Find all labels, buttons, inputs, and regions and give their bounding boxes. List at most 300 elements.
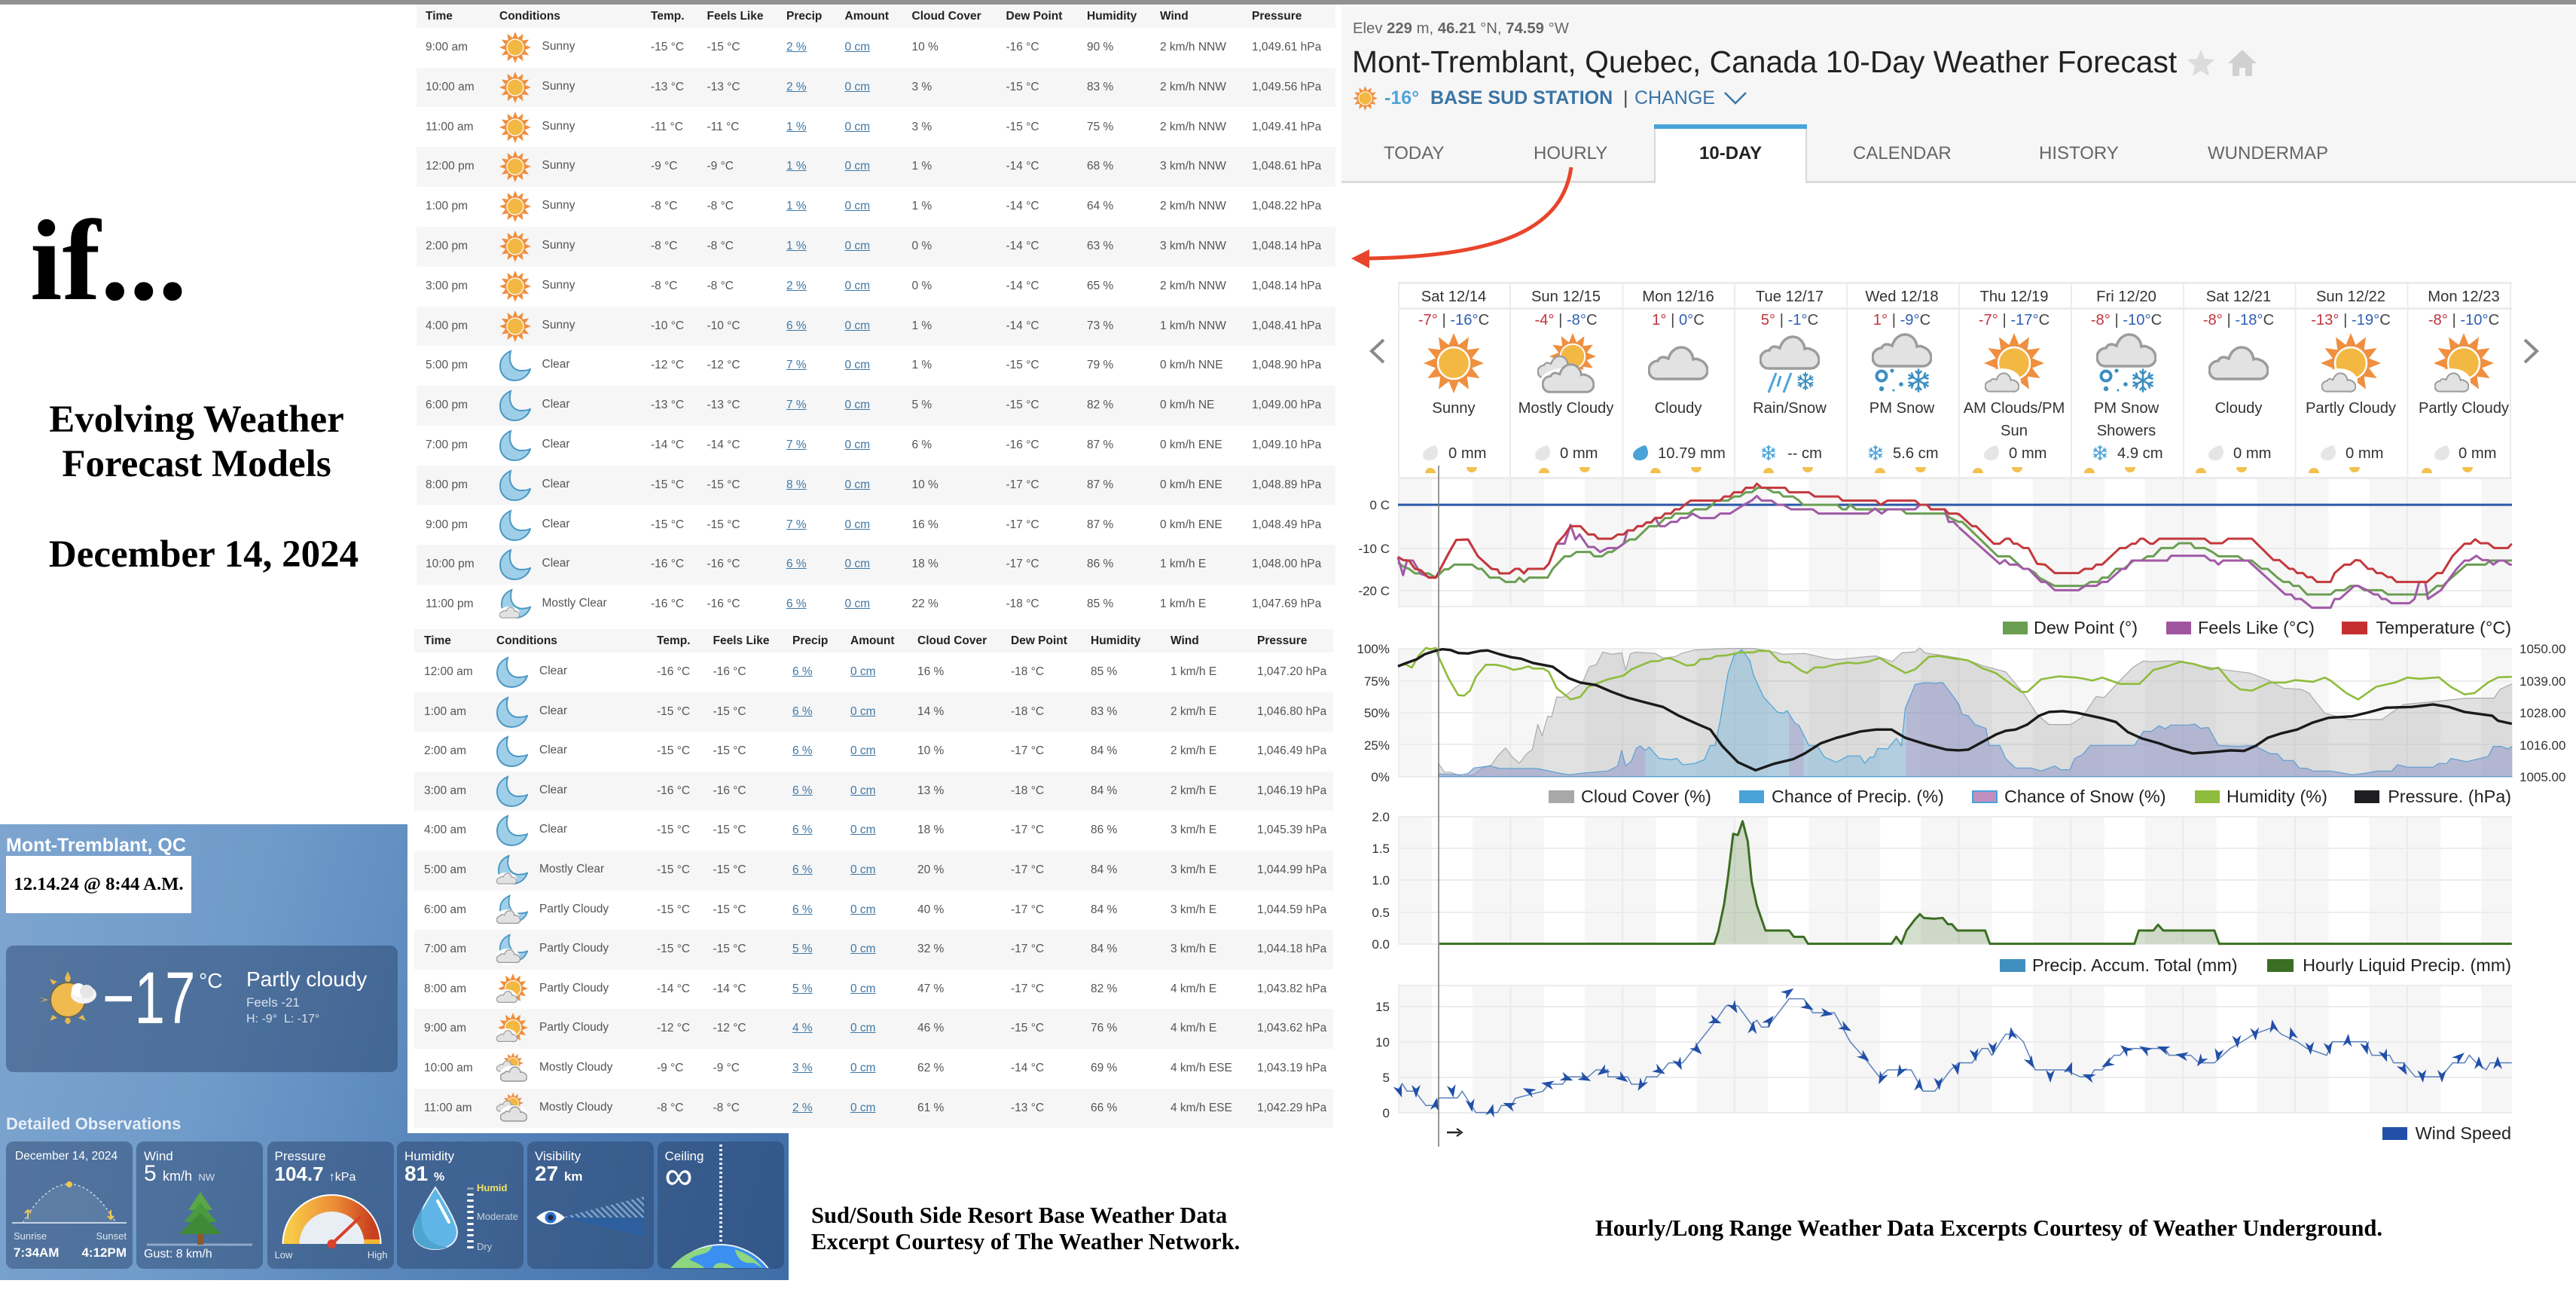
table header: Humidity [1091,634,1140,647]
row 2:00 pm: 1,048.14 hPa [1252,240,1321,252]
row 6:00 pm: 82 % [1087,399,1113,411]
row 9:00 am: 4 % [792,1022,813,1034]
day: Fri 12/20: Fri 12/20 [2096,289,2156,305]
day: Thu 12/19 [1964,289,2065,473]
row 7:00 am [414,930,1333,970]
row 2:00 am [424,735,1327,767]
high and low: H: -9° L: -17° [246,1013,319,1025]
row 10:00 am: 62 % [917,1062,944,1074]
row 7:00 pm: 7 % [786,439,807,451]
date: December 14, 2024 [15,1150,118,1163]
legend: precipitation [2000,955,2511,975]
row 9:00 pm: 87 % [1087,518,1113,531]
row 11:00 am: 1,042.29 hPa [1257,1102,1326,1114]
row 5:00 am: -17 °C [1011,863,1044,876]
legend: precipitation: Hourly Liquid Precip. (mm) [2303,955,2511,975]
day: Sat 12/14: Sunny [1432,400,1476,417]
row 8:00 am: -14 °C [713,982,746,995]
day: Mon 12/23: Mon 12/23 [2428,289,2500,305]
row 9:00 am: 1,043.62 hPa [1257,1022,1326,1034]
row 4:00 am: 0 cm [850,824,876,836]
row 1:00 am: 83 % [1091,705,1117,718]
row 2:00 pm: -14 °C [1006,240,1039,252]
row 1:00 pm [426,191,1321,222]
legend: humidity chart: Cloud Cover (%) [1581,787,1711,806]
chart: temperature [1358,479,2512,608]
chart: humidity cloud precip pressure: 1016.00 [2520,738,2565,753]
wind label: Wind [144,1149,173,1163]
row 8:00 pm: Clear [542,478,570,490]
title: if...: if... [30,197,187,325]
row 4:00 pm: 1 km/h NNW [1160,319,1226,332]
table header: Time [424,634,451,647]
arrow: hourly to table [1351,167,1571,268]
row 10:00 am: 2 % [786,81,807,93]
day: Wed 12/18: Wed 12/18 [1865,289,1939,305]
row 3:00 am: 84 % [1091,784,1117,797]
scale label moderate: Moderate [477,1211,518,1222]
row 6:00 am: 0 cm [850,903,876,916]
row 10:00 am: 10:00 am [426,81,475,93]
row 3:00 pm: -14 °C [1006,280,1039,292]
day: Fri 12/20: 4.9 cm [2117,445,2163,462]
row 8:00 pm: 87 % [1087,478,1113,491]
row 11:00 am: 3 % [911,121,932,133]
row 7:00 pm: 7:00 pm [426,439,468,451]
elevation line: Elev 229 m, 46.21 °N, 74.59 °W [1353,20,1570,37]
row 4:00 pm: 4:00 pm [426,319,468,332]
chart: temperature: -20 C [1358,584,1390,598]
icon: earth and dotted line [657,1141,783,1269]
row 8:00 pm: -15 °C [707,478,740,491]
row 4:00 am: 6 % [792,824,813,836]
row 5:00 pm: 0 cm [845,359,870,371]
day: Mon 12/16: 10.79 mm [1658,445,1726,462]
pressure label: Pressure [274,1149,326,1163]
row 3:00 pm: 2 km/h NNW [1160,280,1226,292]
row 9:00 pm: Clear [542,518,570,530]
row 6:00 am [424,894,1327,924]
table header: Time [426,10,453,23]
tab navigation: CALENDAR [1853,143,1952,163]
row 1:00 am [414,692,1333,732]
table header: Feels Like [707,10,763,23]
tab navigation: WUNDERMAP [2208,143,2328,163]
day: Fri 12/20 [2084,289,2163,473]
row 2:00 am: 2 km/h E [1170,744,1216,757]
day: Mon 12/16: 1° | 0°C [1652,312,1705,328]
row 10:00 pm: 0 cm [845,558,870,570]
icon: small wind arrow [1447,1129,1462,1136]
row 10:00 am: Mostly Cloudy [539,1061,612,1074]
row 4:00 pm: 1,048.41 hPa [1252,319,1321,332]
chart: humidity cloud precip pressure: 0% [1371,770,1390,784]
day: Mon 12/23: 0 mm [2458,445,2496,462]
card: date and sunrise sunset [6,1141,133,1269]
day: Sun 12/15: -4° | -8°C [1534,312,1598,328]
chart: humidity cloud precip pressure: 25% [1364,738,1390,753]
row 10:00 pm [417,545,1335,585]
row 6:00 pm: 1,049.00 hPa [1252,399,1321,411]
panel: hourly table today [417,5,1335,619]
row 2:00 pm: Sunny [542,239,575,252]
row 5:00 pm: 1 % [911,359,932,371]
row 9:00 pm: -17 °C [1006,518,1039,531]
row 2:00 pm: -8 °C [707,240,734,252]
row 10:00 am: -9 °C [713,1062,740,1074]
chart: wind speed: 15 [1375,1000,1390,1014]
row 2:00 am: -17 °C [1011,744,1044,757]
chart: precipitation: 0.5 [1372,906,1390,920]
icon: left chevron [1372,340,1384,362]
day: Fri 12/20: Showers [2097,423,2156,439]
table header [414,629,1333,652]
row 12:00 am: -16 °C [657,665,690,678]
humidity label: Humidity [404,1149,454,1163]
row 11:00 am [414,1089,1333,1128]
heading: Detailed Observations: Detailed Observations [6,1114,181,1133]
row 12:00 pm [417,147,1335,187]
day: Sun 12/22: Sun 12/22 [2316,289,2385,305]
day: Thu 12/19: Sun [2001,423,2028,439]
row 7:00 pm: 0 km/h ENE [1160,439,1222,451]
row 11:00 am: Mostly Cloudy [539,1101,612,1114]
chart: temperature: -10 C [1358,542,1390,556]
row 2:00 pm: 0 % [911,240,932,252]
current station line: BASE SUD STATION [1430,87,1613,108]
row 8:00 am: Partly Cloudy [539,982,609,995]
row 6:00 am: -17 °C [1011,903,1044,916]
row 12:00 pm: Sunny [542,159,575,172]
row 10:00 am: 83 % [1087,81,1113,93]
row 4:00 pm: 6 % [786,319,807,332]
row 6:00 am: 6:00 am [424,903,466,916]
row 11:00 am: 0 cm [845,121,870,133]
day: Wed 12/18 [1865,289,1939,473]
row 5:00 am: 5:00 am [424,863,466,876]
table header: Amount [850,634,895,647]
row 9:00 am: Partly Cloudy [539,1021,609,1034]
chart: humidity cloud precip pressure: 1050.00 [2520,642,2565,656]
row 1:00 am: 2 km/h E [1170,705,1216,718]
row 4:00 am: Clear [539,823,567,836]
row 10:00 pm: -17 °C [1006,558,1039,570]
low label: Low [274,1249,292,1261]
row 6:00 pm: 0 km/h NE [1160,399,1214,411]
row 3:00 am: 0 cm [850,784,876,797]
row 6:00 am: -15 °C [657,903,690,916]
sunrise time: 7:34AM [14,1245,59,1260]
row 12:00 pm: -9 °C [707,160,734,173]
row 10:00 am: -13 °C [651,81,684,93]
row 4:00 pm: -10 °C [707,319,740,332]
row 8:00 am: 8:00 am [424,982,466,995]
row 11:00 am: 4 km/h ESE [1170,1102,1232,1114]
row 1:00 am: 1,046.80 hPa [1257,705,1326,718]
scale label dry: Dry [477,1241,492,1252]
row 5:00 pm: 7 % [786,359,807,371]
row 12:00 am: 0 cm [850,665,876,678]
row 10:00 am: 10:00 am [424,1062,473,1074]
row 12:00 am: Clear [539,665,567,677]
row 5:00 pm: 0 km/h NNE [1160,359,1223,371]
row 8:00 pm: 10 % [911,478,939,491]
row 2:00 pm: 1 % [786,240,807,252]
day: Thu 12/19: -7° | -17°C [1979,312,2050,328]
row 6:00 pm: 7 % [786,399,807,411]
row 1:00 pm: 2 km/h NNW [1160,200,1226,212]
row 4:00 am: 18 % [917,824,944,836]
row 6:00 pm: 5 % [911,399,932,411]
row 5:00 pm: 5:00 pm [426,359,468,371]
day: Sun 12/22: -13° | -19°C [2311,312,2391,328]
row 9:00 pm: -15 °C [707,518,740,531]
row 9:00 am: 2 % [786,41,807,53]
row 2:00 pm: -8 °C [651,240,677,252]
row 11:00 am: 11:00 am [426,121,473,133]
row 10:00 am: -14 °C [1011,1062,1044,1074]
row 12:00 pm: -9 °C [651,160,677,173]
row 1:00 pm: Sunny [542,199,575,212]
day: Mon 12/23: Partly Cloudy [2419,400,2510,417]
row 10:00 am: 4 km/h ESE [1170,1062,1232,1074]
chart: precipitation: 1.5 [1372,842,1390,856]
row 10:00 am: 3 % [911,81,932,93]
row 1:00 pm: 64 % [1087,200,1113,212]
row 8:00 pm [417,466,1335,505]
tab navigation [1384,124,2328,185]
row 8:00 pm: 8 % [786,478,807,491]
row 9:00 am: -15 °C [651,41,684,53]
day: Sat 12/14: -7° | -16°C [1418,312,1489,328]
row 12:00 pm: 3 km/h NNW [1160,160,1226,173]
row 6:00 am: -15 °C [713,903,746,916]
legend: humidity chart [1549,787,2511,806]
row 4:00 pm: -10 °C [651,319,684,332]
row 11:00 am: 1,049.41 hPa [1252,121,1321,133]
table header: Wind [1170,634,1199,647]
row 6:00 pm [417,386,1335,426]
table header: Pressure [1257,634,1307,647]
row 10:00 am [414,1049,1333,1089]
row 3:00 am: 1,046.19 hPa [1257,784,1326,797]
row 12:00 am: 85 % [1091,665,1117,678]
row 9:00 am: 46 % [917,1022,944,1034]
row 9:00 am: 2 km/h NNW [1160,41,1226,53]
row 8:00 am: 4 km/h E [1170,982,1216,995]
day: Sun 12/15: 0 mm [1560,445,1598,462]
row 6:00 am: Partly Cloudy [539,903,609,915]
row 12:00 am: 1 km/h E [1170,665,1216,678]
row 6:00 am: 6 % [792,903,813,916]
row 4:00 am: -17 °C [1011,824,1044,836]
row 8:00 pm: -17 °C [1006,478,1039,491]
row 6:00 pm: -13 °C [707,399,740,411]
row 11:00 pm: 1,047.69 hPa [1252,597,1321,610]
row 1:00 am: 6 % [792,705,813,718]
location heading: Mont-Tremblant, QC [6,835,186,856]
day: Mon 12/23 [2419,289,2510,473]
row 9:00 am: -15 °C [707,41,740,53]
row 9:00 am [426,32,1321,63]
row 7:00 pm [426,429,1321,461]
row 5:00 am: 20 % [917,863,944,876]
row 11:00 pm: -16 °C [707,597,740,610]
row 9:00 pm: 7 % [786,518,807,531]
row 5:00 am [414,851,1333,891]
row 1:00 pm: 0 cm [845,200,870,212]
row 10:00 am: 3 % [792,1062,813,1074]
day: Sun 12/22: Partly Cloudy [2306,400,2397,417]
table header: Cloud Cover [917,634,987,647]
icon: water drop and scale [397,1141,523,1269]
row 3:00 am: 13 % [917,784,944,797]
row 5:00 am: 84 % [1091,863,1117,876]
legend: temperature: Temperature (°C) [2376,618,2511,637]
row 4:00 am: 86 % [1091,824,1117,836]
page title: Mont-Tremblant, Quebec, Canada 10-Day Weather Forecast [1352,44,2178,79]
row 5:00 pm: Clear [542,358,570,371]
row 11:00 pm: 0 cm [845,597,870,610]
row 3:00 pm: 65 % [1087,280,1113,292]
row 7:00 am: 7:00 am [424,943,466,955]
icon: home [2228,50,2257,76]
row 11:00 pm: 85 % [1087,597,1113,610]
row 1:00 am: -15 °C [713,705,746,718]
heading: date: December 14, 2024 [49,533,359,576]
row 11:00 am: 2 km/h NNW [1160,121,1226,133]
row 9:00 am: 9:00 am [424,1022,466,1034]
row 12:00 am: -18 °C [1011,665,1044,678]
row 9:00 am: 9:00 am [426,41,468,53]
chart: wind speed: 10 [1375,1035,1390,1050]
row 10:00 am: -13 °C [707,81,740,93]
row 10:00 am: 1,043.19 hPa [1257,1062,1326,1074]
row 4:00 am: 3 km/h E [1170,824,1216,836]
row 3:00 pm: Sunny [542,279,575,292]
chart: wind speed: 0 [1383,1106,1390,1120]
table header [417,5,1335,28]
row 11:00 am: 11:00 am [424,1102,472,1114]
day: Tue 12/17: -- cm [1787,445,1822,462]
row 9:00 am: 1,049.61 hPa [1252,41,1321,53]
row 3:00 am: 3:00 am [424,784,466,797]
table header: Precip [792,634,828,647]
date stamp box [6,856,191,913]
visibility value: 27 km [535,1162,583,1185]
row 9:00 am: Sunny [542,40,575,53]
chart: humidity cloud precip pressure: 1005.00 [2520,770,2565,784]
row 10:00 pm: -16 °C [651,558,684,570]
row 11:00 pm: Mostly Clear [542,597,607,610]
row 8:00 am: -17 °C [1011,982,1044,995]
high label: High [368,1249,387,1261]
card: wind [136,1141,263,1269]
sunrise label: Sunrise [14,1230,47,1242]
row 3:00 am: 6 % [792,784,813,797]
row 6:00 pm: 0 cm [845,399,870,411]
row 12:00 am: -16 °C [713,665,746,678]
row 9:00 am: -15 °C [1011,1022,1044,1034]
row 10:00 pm: 6 % [786,558,807,570]
row 3:00 am: 2 km/h E [1170,784,1216,797]
row 9:00 pm: 16 % [911,518,939,531]
row 3:00 pm [426,270,1321,302]
row 2:00 am: Clear [539,744,567,756]
row 11:00 pm: 1 km/h E [1160,597,1206,610]
row 9:00 am: 0 cm [845,41,870,53]
row 7:00 pm: -16 °C [1006,439,1039,451]
row 2:00 am: 84 % [1091,744,1117,757]
row 1:00 pm: 1:00 pm [426,200,468,212]
row 7:00 pm: 6 % [911,439,932,451]
card: humidity [397,1141,523,1269]
legend: humidity chart: Humidity (%) [2227,787,2327,806]
icon: tree [147,1192,252,1246]
row 6:00 am: 1,044.59 hPa [1257,903,1326,916]
icon: star [2187,50,2214,76]
day: Tue 12/17: 5° | -1°C [1761,312,1818,328]
day: Fri 12/20: -8° | -10°C [2091,312,2162,328]
row 3:00 pm: 1,048.14 hPa [1252,280,1321,292]
day: Sat 12/21: -8° | -18°C [2203,312,2274,328]
row 7:00 am: -15 °C [713,943,746,955]
row 2:00 am: 2:00 am [424,744,466,757]
row 12:00 pm: 0 cm [845,160,870,173]
icon: eye and sight cone [527,1141,654,1269]
row 11:00 am: 0 cm [850,1102,876,1114]
row 9:00 am: 10 % [911,41,939,53]
row 12:00 pm: 1 % [911,160,932,173]
row 6:00 am: 84 % [1091,903,1117,916]
day: Wed 12/18: 1° | -9°C [1873,312,1930,328]
chart: temperature: 0 C [1370,498,1390,512]
day: Sun 12/15 [1518,289,1614,473]
row 5:00 am: Mostly Clear [539,863,604,875]
current station line: -16° [1384,87,1419,108]
feels like: Feels -21 [246,995,300,1010]
row 7:00 am: 84 % [1091,943,1117,955]
row 1:00 am: -18 °C [1011,705,1044,718]
row 10:00 am: 1,049.56 hPa [1252,81,1321,93]
table header: Amount [845,10,889,23]
caption: The Weather Network credit: Sud/South Side Resort Base Weather Data [811,1202,1227,1228]
row 7:00 am: -17 °C [1011,943,1044,955]
row 5:00 pm: -12 °C [707,359,740,371]
row 1:00 pm: -8 °C [651,200,677,212]
row 4:00 am: 4:00 am [424,824,466,836]
row 9:00 am: -12 °C [713,1022,746,1034]
legend: temperature: Feels Like (°C) [2198,618,2315,637]
day: Sat 12/21 [2196,289,2274,473]
row 9:00 am: -16 °C [1006,41,1039,53]
row 2:00 pm: 0 cm [845,240,870,252]
legend: temperature [2003,618,2511,637]
row 8:00 pm: 0 cm [845,478,870,491]
legend: temperature: Dew Point (°) [2034,618,2138,637]
day: Sat 12/14: 0 mm [1448,445,1486,462]
row 11:00 am: 75 % [1087,121,1113,133]
row 11:00 pm: -18 °C [1006,597,1039,610]
day: Thu 12/19: Thu 12/19 [1980,289,2048,305]
humidity value: 81 % [404,1162,444,1185]
legend: humidity chart: Chance of Snow (%) [2004,787,2166,806]
row 4:00 pm: 0 cm [845,319,870,332]
row 2:00 am: -15 °C [657,744,690,757]
table header: Cloud Cover [911,10,981,23]
chart: wind speed [1375,985,2512,1120]
row 11:00 am: -11 °C [651,121,683,133]
